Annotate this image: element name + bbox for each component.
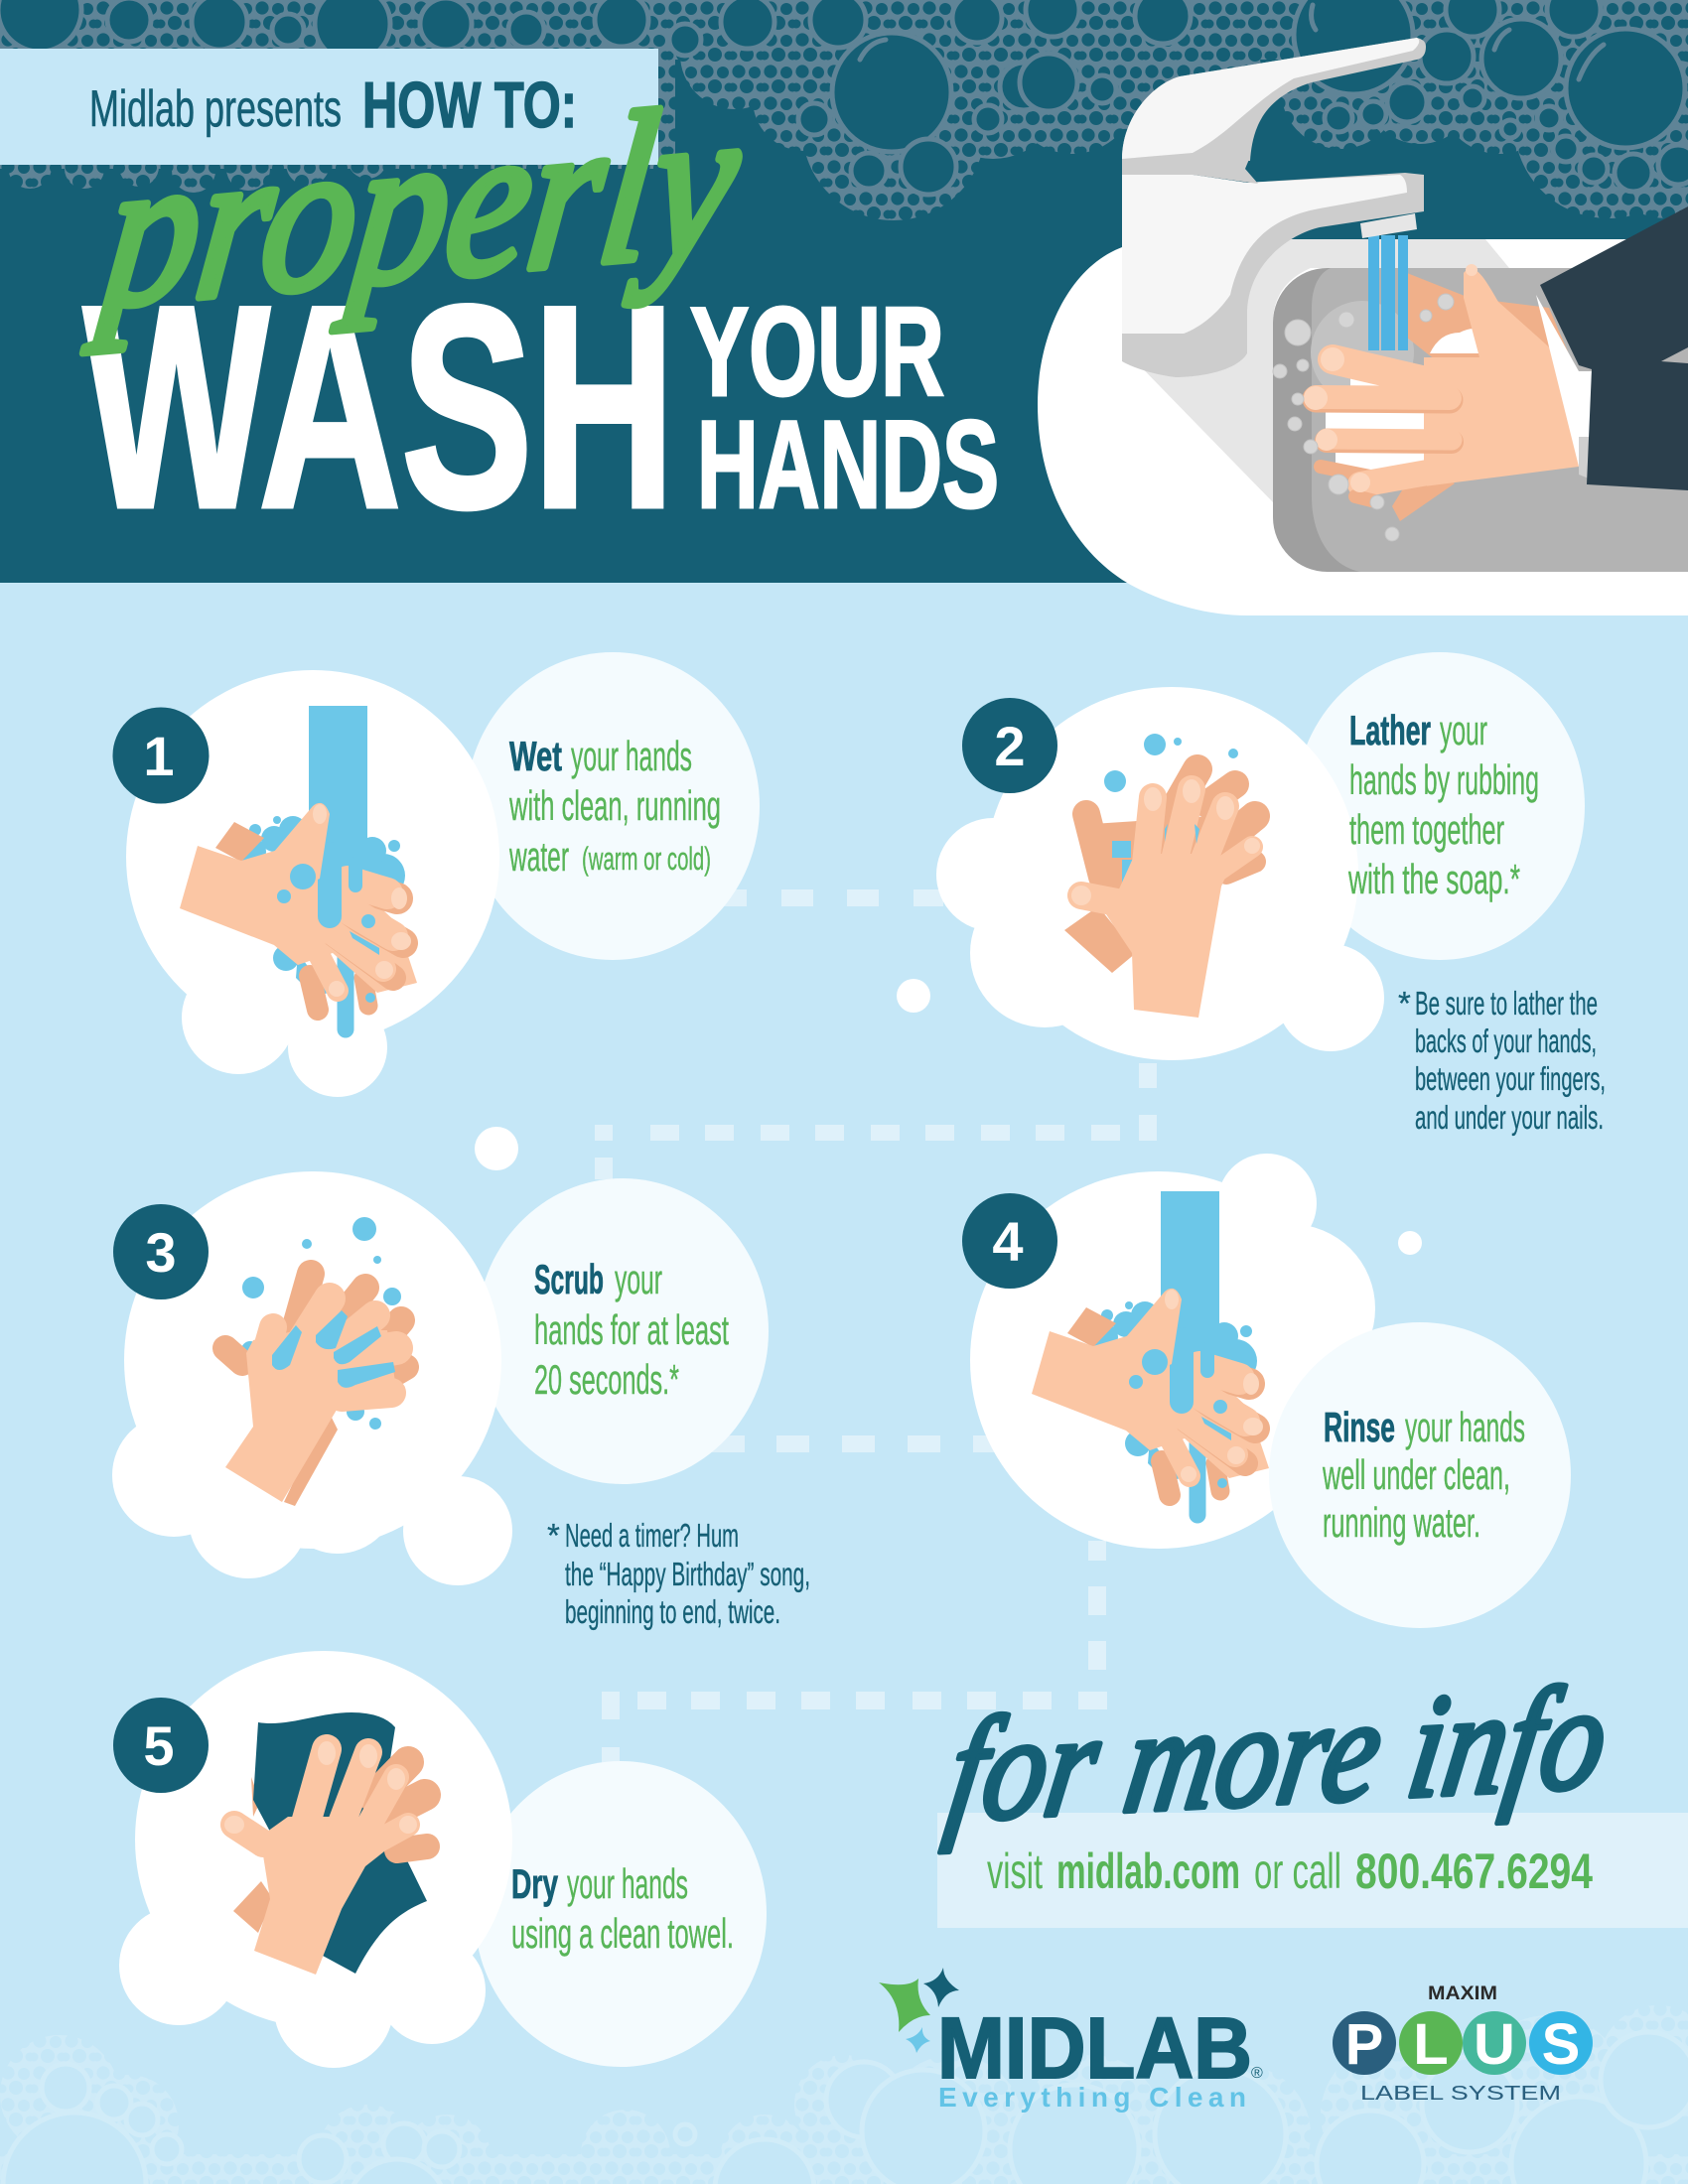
contact line: or call <box>1254 1843 1341 1899</box>
step 5 number badge: 5 <box>143 1714 175 1777</box>
step 5 number badge <box>113 1698 209 1793</box>
small floating bubbles <box>475 979 1422 1255</box>
back hand <box>1392 273 1579 521</box>
step 3 foam blob <box>112 1171 512 1585</box>
step 1 number badge: 1 <box>143 725 175 787</box>
step 4 text: Rinse <box>1324 1404 1395 1450</box>
logo: maxim plus: LABEL SYSTEM <box>1360 2083 1561 2105</box>
step 2 illustration <box>1064 734 1260 1018</box>
front hand <box>1424 269 1581 486</box>
title: wash your hands: YOUR <box>690 281 944 422</box>
step 2 text: hands by rubbing <box>1349 756 1539 803</box>
banner text <box>89 68 577 141</box>
water stream <box>1368 235 1408 350</box>
step 1 illustration <box>180 706 417 1029</box>
icon: sparkles <box>879 1968 959 2053</box>
step 2 text: Lather <box>1349 707 1431 753</box>
logo: midlab: Everything Clean <box>938 2082 1246 2113</box>
step 4 text: your hands <box>1405 1404 1525 1450</box>
bubbles <box>1273 294 1454 541</box>
contact line: 800.467.6294 <box>1355 1843 1593 1899</box>
faucet shadow <box>1122 239 1509 502</box>
step 1 foam blob <box>126 670 499 1097</box>
step 1 text: your hands <box>571 733 692 779</box>
step 2 text <box>1347 707 1539 902</box>
logo: midlab <box>879 1968 1263 2113</box>
step 3 text: 20 seconds.* <box>534 1356 679 1403</box>
basin <box>1273 268 1688 572</box>
logo: midlab: MIDLAB <box>937 2000 1252 2097</box>
step 1 text: with clean, running <box>508 782 721 829</box>
step 3 illustration <box>225 1217 406 1506</box>
step 3 text: hands for at least <box>534 1306 729 1353</box>
dashed connectors <box>595 889 1157 1767</box>
title: properly script: properly <box>82 60 752 354</box>
step 2 number badge: 2 <box>994 715 1026 777</box>
step 3 footnote <box>547 1517 810 1630</box>
contact line: midlab.com <box>1056 1843 1240 1899</box>
faucet collar <box>1122 157 1258 184</box>
panel: step 5 dry <box>113 1651 767 2068</box>
white gaps between fingers <box>1326 375 1430 473</box>
step 4 text: well under clean, <box>1322 1451 1510 1498</box>
title banner <box>0 49 658 165</box>
step 5 text: using a clean towel. <box>511 1910 734 1957</box>
step 5 foam blob <box>119 1651 512 2068</box>
step 1 text: Wet <box>509 733 562 779</box>
step 2 text: them together <box>1349 806 1504 853</box>
step 2 text: with the soap.* <box>1347 856 1520 902</box>
step 1 text: water <box>508 833 569 880</box>
step 1 text: (warm or cold) <box>582 841 711 877</box>
step 2 footnote <box>1398 985 1606 1136</box>
banner text: HOW TO: <box>362 68 577 141</box>
step 4 text bubble <box>1269 1322 1571 1628</box>
step 3 text <box>534 1256 729 1403</box>
step 1 text <box>508 733 721 880</box>
contact line <box>987 1843 1593 1899</box>
panel: step 3 scrub <box>112 1171 810 1630</box>
title: wash your hands: HANDS <box>697 396 999 534</box>
pale foam behind hands <box>1311 301 1414 404</box>
panel: step 2 lather <box>936 652 1606 1136</box>
step 3 text bubble <box>477 1178 769 1484</box>
step 4 text <box>1322 1404 1525 1546</box>
step 3 number badge <box>113 1204 209 1299</box>
step 5 text: Dry <box>511 1860 558 1907</box>
step 3 footnote: the “Happy Birthday” song, <box>565 1556 810 1592</box>
step 4 text: running water. <box>1323 1499 1480 1546</box>
step 3 text: Scrub <box>534 1256 604 1302</box>
header foam <box>0 0 1688 220</box>
step 5 text: your hands <box>567 1860 688 1907</box>
step 2 footnote: * <box>1398 985 1411 1022</box>
step 1 number badge <box>113 707 209 804</box>
panel: step 1 wet <box>113 652 760 1097</box>
sink body <box>1038 239 1688 615</box>
faucet lever <box>1122 38 1426 161</box>
bottom foam background <box>0 2005 1688 2184</box>
step 3 footnote: Need a timer? Hum <box>565 1517 739 1554</box>
title: wash your hands: WASH <box>83 246 675 568</box>
step 5 illustration <box>224 1712 427 1975</box>
suit sleeve and cuff <box>1536 295 1592 477</box>
panel: step 4 rinse <box>962 1154 1571 1628</box>
faucet body <box>1122 173 1424 377</box>
step 5 text bubble <box>475 1761 767 2067</box>
step 3 text: your <box>615 1256 662 1302</box>
step 1 text bubble <box>466 652 760 960</box>
logo: midlab: ® <box>1251 2065 1263 2082</box>
logo: maxim plus <box>1333 1983 1593 2105</box>
logo: maxim plus: U <box>1474 2012 1515 2077</box>
step 4 illustration <box>1032 1191 1269 1515</box>
step 4 number badge: 4 <box>992 1210 1024 1273</box>
logo: maxim plus: P <box>1345 2012 1383 2077</box>
logo: maxim plus: S <box>1542 2012 1580 2077</box>
step 4 foam blob <box>970 1154 1375 1549</box>
contact line: visit <box>987 1843 1043 1899</box>
info bar <box>937 1813 1688 1928</box>
step 2 text: your <box>1440 707 1487 753</box>
banner text: Midlab presents <box>89 80 342 138</box>
step 2 foam blob <box>936 687 1384 1060</box>
logo: maxim plus: MAXIM <box>1428 1983 1497 2004</box>
for more info script: for more info <box>938 1655 1618 1853</box>
white soap on hands <box>1430 329 1487 353</box>
header band <box>0 0 1688 583</box>
faucet aerator <box>1360 213 1417 238</box>
step 4 number badge <box>962 1193 1057 1289</box>
step 2 text bubble <box>1295 652 1585 960</box>
step 3 footnote: beginning to end, twice. <box>565 1593 780 1630</box>
sink <box>1038 38 1688 615</box>
step 3 footnote: * <box>547 1517 560 1554</box>
logo: maxim plus: L <box>1413 2012 1449 2077</box>
step 2 number badge <box>962 698 1057 793</box>
step 3 number badge: 3 <box>145 1221 177 1284</box>
step 5 text <box>511 1860 734 1957</box>
